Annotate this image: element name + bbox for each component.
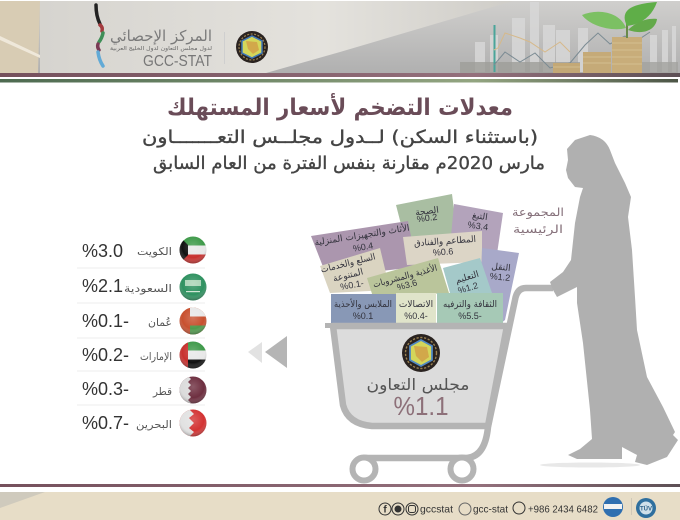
item: health: الصحة bbox=[415, 206, 439, 218]
item: education bbox=[443, 258, 492, 296]
panel: basket items bbox=[311, 194, 519, 324]
header: statistics centre ribbon bbox=[96, 5, 103, 66]
item: education: %1.2 bbox=[457, 280, 479, 296]
item: culture and recreation: %5.5- bbox=[458, 311, 482, 321]
item: restaurants and hotels bbox=[403, 231, 482, 265]
item: clothing and footwear: الملابس والأحذية bbox=[334, 298, 392, 310]
footer: social icons and contacts: +986 2434 6482 bbox=[528, 504, 598, 516]
item: transport bbox=[480, 248, 519, 324]
row: Oman bbox=[82, 307, 207, 335]
icon: GCC emblem on cart bbox=[402, 334, 440, 372]
panel: country rates bbox=[77, 236, 207, 437]
row: Kuwait: الكويت bbox=[137, 246, 172, 258]
GCC label: مجلس التعاون bbox=[366, 375, 470, 395]
item: clothing and footwear: %0.1 bbox=[353, 311, 373, 321]
title bbox=[142, 92, 545, 174]
item: restaurants and hotels: المطاعم والفنادق bbox=[414, 235, 476, 249]
item: health bbox=[396, 194, 457, 240]
title: مارس 2020م مقارنة بنفس الفترة من العام السابق bbox=[153, 153, 545, 174]
item: education: التعليم bbox=[454, 270, 480, 286]
row: Bahrain: %0.7- bbox=[82, 413, 129, 433]
row: UAE: الإمارات bbox=[140, 351, 172, 363]
item: restaurants and hotels: %0.6 bbox=[432, 246, 454, 258]
header banner bbox=[0, 1, 680, 82]
row: Qatar bbox=[82, 376, 207, 404]
header: skyline and growth illustration bbox=[460, 2, 678, 73]
item: furniture and household equipment: الأثاث والتجهيزات المنزلية bbox=[314, 222, 410, 248]
item: communications: الاتصالات bbox=[399, 300, 433, 310]
row: Kuwait bbox=[82, 236, 207, 264]
header: statistics centre name: لدول مجلس التعاون لدول الخليج العربية bbox=[110, 46, 212, 52]
footer: social icons and contacts: f bbox=[383, 504, 387, 516]
row: UAE: %0.2- bbox=[82, 345, 129, 365]
row: Saudi Arabia: السعودية bbox=[124, 283, 172, 295]
row: Oman: عُمان bbox=[148, 317, 172, 329]
label: main groups bbox=[512, 205, 564, 237]
footer: social icons and contacts bbox=[379, 502, 598, 516]
item: tobacco bbox=[450, 204, 503, 254]
footer: certification badges: TÜV bbox=[640, 506, 652, 512]
footer bbox=[0, 484, 680, 520]
item: miscellaneous goods and services bbox=[320, 248, 390, 293]
row: Bahrain bbox=[82, 409, 207, 437]
arrows pointing to countries bbox=[248, 336, 287, 368]
item: miscellaneous goods and services: السلع والخدمات bbox=[320, 252, 377, 276]
item: miscellaneous goods and services: %0.1- bbox=[340, 278, 364, 292]
item: communications bbox=[396, 293, 436, 324]
footer: certification badges bbox=[603, 497, 656, 518]
item: transport: النقل bbox=[491, 262, 511, 274]
item: food and beverages: %3.6 bbox=[396, 278, 418, 292]
item: culture and recreation: الثقافة والترفيه bbox=[443, 300, 497, 310]
title: معدلات التضخم لأسعار المستهلك bbox=[167, 92, 513, 121]
row: UAE bbox=[82, 341, 207, 370]
header: statistics centre name: المركز الإحصائي bbox=[110, 27, 212, 46]
item: tobacco: %3.4 bbox=[467, 220, 489, 232]
row: Qatar: %0.3- bbox=[82, 379, 129, 399]
item: food and beverages: الأغذية والمشروبات bbox=[372, 262, 438, 290]
item: tobacco: التبغ bbox=[472, 211, 488, 223]
item: transport: %1.2 bbox=[489, 271, 511, 283]
row: Kuwait: %3.0 bbox=[82, 241, 123, 261]
label: main groups: المجموعة bbox=[512, 205, 564, 220]
row: Saudi Arabia: %2.1 bbox=[82, 276, 123, 296]
item: furniture and household equipment: %0.4 bbox=[352, 240, 374, 254]
row: Qatar: قطر bbox=[152, 386, 172, 398]
title: (باستثناء السكن) لــدول مجلــس التعـــــــاون bbox=[142, 127, 538, 148]
icon: person silhouette bbox=[540, 135, 678, 468]
item: miscellaneous goods and services: المتنوعة bbox=[332, 267, 364, 285]
item: health: %0.2 bbox=[416, 212, 438, 224]
label: main groups: الرئيسية bbox=[513, 222, 563, 237]
row: Oman: %0.1- bbox=[82, 311, 129, 331]
item: clothing and footwear bbox=[331, 294, 396, 324]
header: statistics centre name bbox=[110, 27, 212, 70]
item: culture and recreation bbox=[437, 293, 503, 324]
item: food and beverages bbox=[367, 258, 449, 297]
icon: GCC emblem bbox=[236, 31, 268, 63]
item: furniture and household equipment bbox=[311, 221, 417, 277]
footer: social icons and contacts: gcc-stat bbox=[473, 504, 508, 516]
row: Bahrain: البحرين bbox=[136, 419, 172, 431]
item: communications: %0.4- bbox=[404, 311, 428, 321]
row: Saudi Arabia bbox=[82, 273, 207, 301]
shopping cart bbox=[325, 288, 553, 480]
header: statistics centre name: GCC-STAT bbox=[143, 53, 212, 70]
GCC rate: %1.1 bbox=[394, 391, 448, 421]
footer: social icons and contacts: gccstat bbox=[420, 504, 453, 516]
